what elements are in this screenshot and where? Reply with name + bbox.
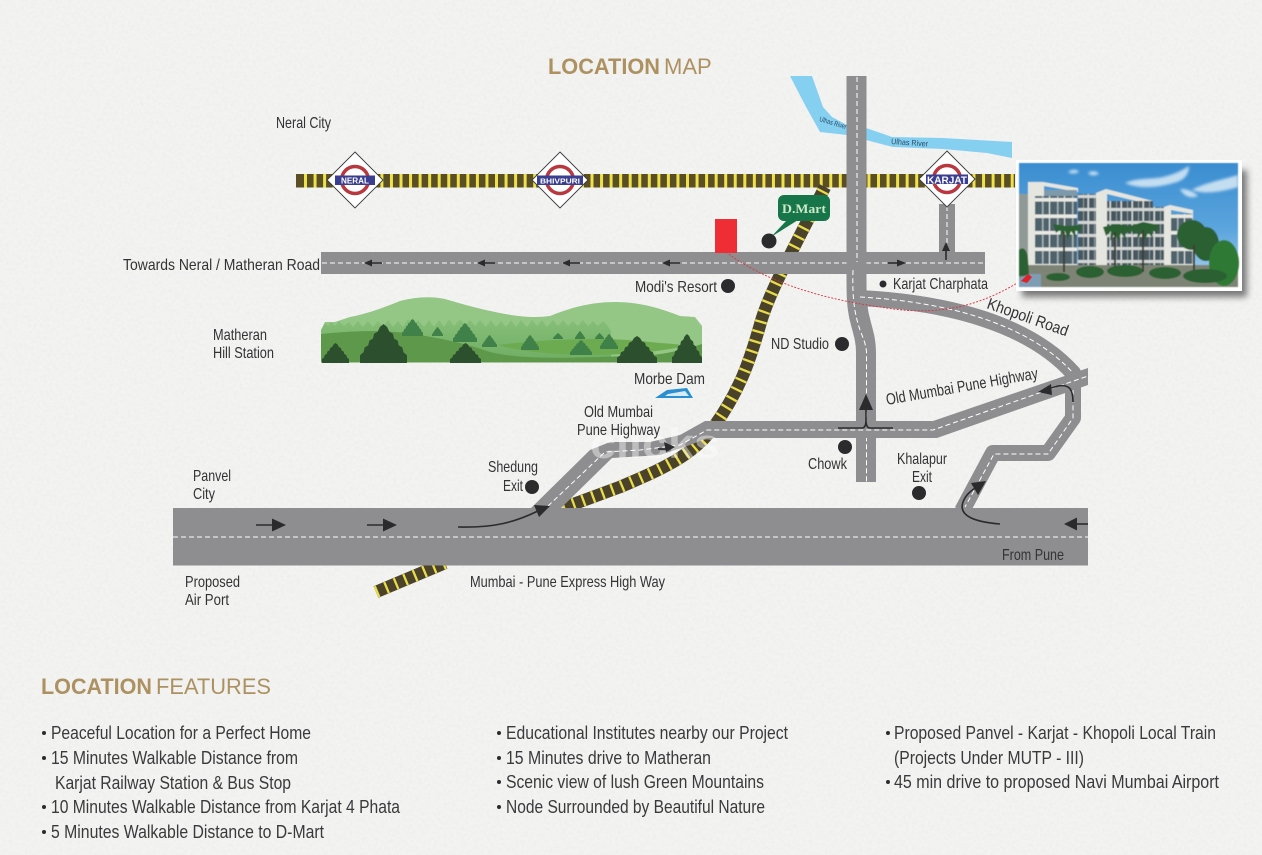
labels: place names: Old Mumbai [584, 404, 653, 421]
features: column 1: 10 Minutes Walkable Distance from Karjat 4 Phata [51, 796, 401, 817]
features: column 1: Peaceful Location for a Perfect Home [51, 722, 311, 743]
D-Mart callout [762, 195, 830, 248]
labels: place names: Neral City [276, 115, 331, 132]
labels: place names: Khopoli Road [985, 296, 1070, 340]
station sign: Neral [327, 152, 383, 208]
landmark: Khalapur Exit: Exit [912, 469, 932, 486]
landmark: Shedung Exit [488, 459, 539, 495]
labels: place names: Panvel [193, 468, 231, 485]
river: Ulhas: Ulhas River [891, 137, 929, 149]
landmark: Khalapur Exit [897, 451, 948, 500]
hills illustration: Matheran [321, 297, 702, 363]
river: Ulhas [790, 76, 1012, 158]
arrow: Khalapur exit curve [962, 481, 1000, 524]
features: column 3: (Projects Under MUTP - III) [894, 747, 1084, 768]
labels: place names: Mumbai - Pune Express High Way [470, 574, 665, 591]
labels: place names: From Pune [1002, 547, 1064, 564]
landmark: Shedung Exit: Exit [503, 478, 523, 495]
landmark: Morbe Dam [634, 371, 705, 398]
features: column 1: 15 Minutes Walkable Distance from [51, 747, 298, 768]
railway line: horizontal [296, 174, 1015, 188]
watermark: clicks [590, 420, 720, 467]
landmark: Chowk [808, 440, 852, 473]
arrow: Shedung exit curve [458, 505, 550, 527]
labels: place names: Matheran [213, 327, 267, 344]
features: column 1: Karjat Railway Station & Bus Stop [55, 772, 291, 793]
red project marker [715, 219, 737, 253]
project photo [1016, 160, 1247, 297]
road: Old Mumbai Pune Highway [530, 368, 1088, 509]
arrows: top road westbound [364, 260, 680, 266]
labels: place names: Towards Neral / Matheran Road [123, 257, 320, 274]
labels: place names: Pune Highway [577, 422, 660, 439]
features: column 2: Node Surrounded by Beautiful Nature [506, 796, 765, 817]
labels: place names: City [193, 486, 215, 503]
labels: place names: Air Port [185, 592, 229, 609]
station sign: Neral: NERAL [341, 176, 369, 186]
labels: place names: Old Mumbai Pune Highway [885, 365, 1039, 409]
landmark: Morbe Dam: Morbe Dam [634, 371, 705, 388]
features: column 2: Educational Institutes nearby our Project [506, 722, 788, 743]
features: column 3: 45 min drive to proposed Navi Mumbai Airport [894, 771, 1219, 792]
title: LOCATIONMAP [548, 54, 712, 79]
arrows: expressway eastbound [256, 518, 397, 532]
station sign: Karjat [919, 151, 975, 207]
road: Karjat station branch [939, 204, 955, 254]
red dotted route line [726, 252, 1022, 311]
arrow: old highway [658, 442, 675, 452]
arrow: junction T [838, 394, 893, 428]
features: column 2: Scenic view of lush Green Mountains [506, 771, 764, 792]
landmark: Modi's Resort: Modi's Resort [635, 279, 717, 296]
arrow: expressway westbound [1064, 518, 1088, 530]
station sign: Bhivpuri: BHIVPURI [540, 176, 580, 186]
road: Khopoli road [858, 297, 1073, 511]
road: north-south road [853, 76, 866, 482]
labels: place names: Hill Station [213, 345, 274, 362]
railway line: diagonal lower [376, 187, 825, 592]
labels: place names [123, 115, 1070, 609]
features: column 1: 5 Minutes Walkable Distance to D-Mart [51, 821, 324, 842]
road: Mumbai Pune expressway [173, 508, 1088, 566]
river: Ulhas: Ulhas River [818, 116, 848, 131]
features: column 1 [42, 722, 401, 842]
features: column 2: 15 Minutes drive to Matheran [506, 747, 711, 768]
road: Neral Matheran road [321, 252, 985, 274]
landmark: ND Studio: ND Studio [771, 336, 829, 353]
features: column 3 [886, 722, 1219, 792]
landmark: Khalapur Exit: Khalapur [897, 451, 948, 468]
labels: place names: Proposed [185, 574, 240, 591]
features: column 2 [497, 722, 788, 817]
landmark: Shedung Exit: Shedung [488, 459, 538, 476]
D-Mart callout: D.Mart [782, 201, 827, 216]
arrow: up to Karjat [942, 242, 950, 260]
heading: location features: LOCATIONFEATURES [41, 674, 271, 699]
landmark: Karjat Charphata: Karjat Charphata [893, 276, 988, 293]
arrow: top road eastbound [888, 260, 906, 266]
landmark: Chowk: Chowk [808, 456, 848, 473]
arrow: top right curve [1038, 384, 1073, 402]
station sign: Bhivpuri [532, 152, 588, 208]
station sign: Karjat: KARJAT [927, 176, 967, 186]
